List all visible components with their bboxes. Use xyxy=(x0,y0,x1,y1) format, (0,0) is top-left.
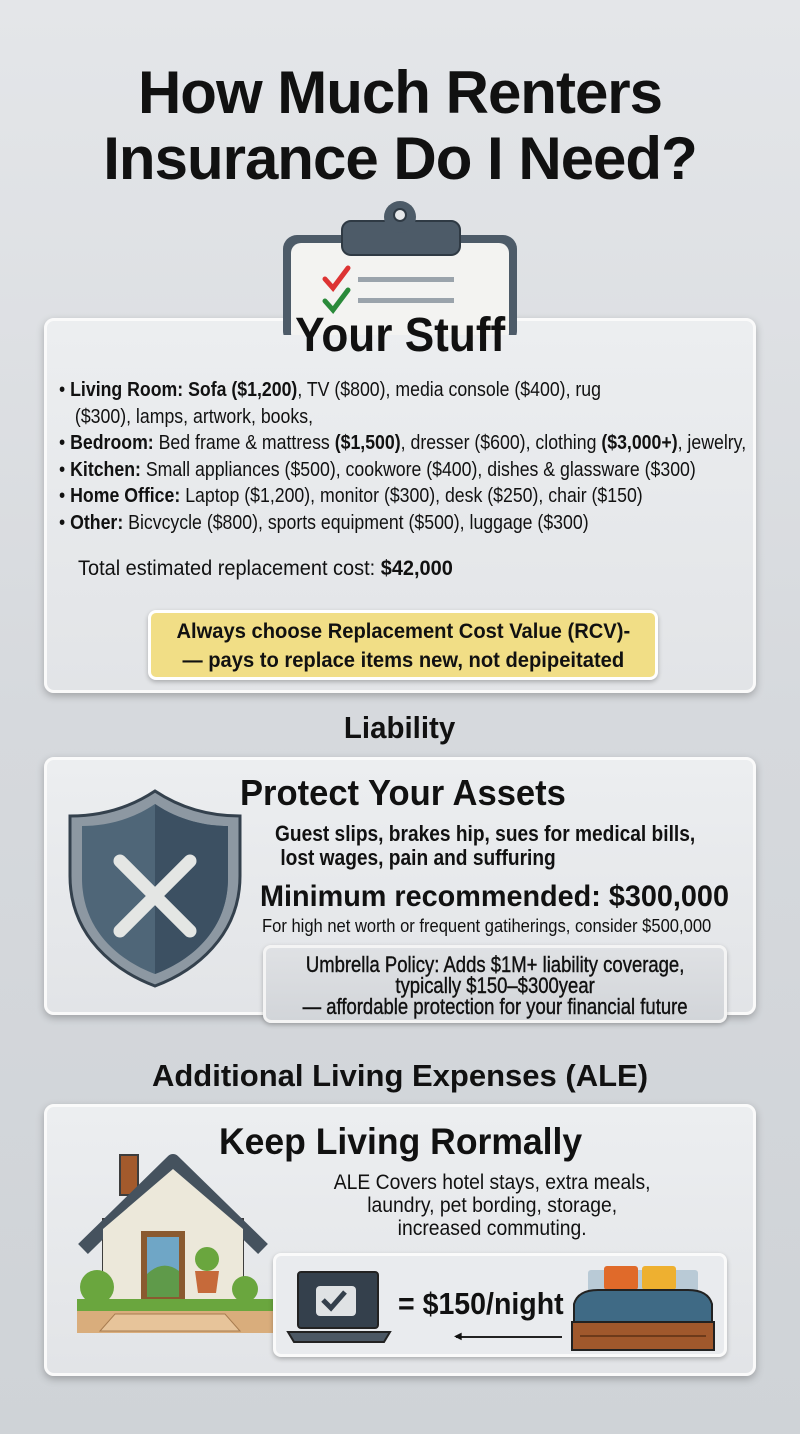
heading: keep living: Keep Living Rormally xyxy=(219,1121,582,1162)
heading: protect your assets: Protect Your Assets xyxy=(240,772,566,813)
text: ALE covers: increased commuting. xyxy=(397,1217,587,1240)
text: $150/night: = $150/night xyxy=(398,1286,564,1321)
title: How Much Renters xyxy=(138,59,662,126)
text: high net worth: For high net worth or frequent gatiherings, consider $500,000 xyxy=(262,916,711,936)
text: ALE covers xyxy=(334,1171,650,1240)
list of items xyxy=(59,379,746,534)
heading: your stuff: Your Stuff xyxy=(295,309,505,362)
icon: clipboard xyxy=(283,201,517,335)
list of items: • Kitchen: Small appliances ($500), cookwore ($400), dishes & glassware ($300) xyxy=(59,458,696,480)
panel: your stuff xyxy=(44,318,756,693)
arrow xyxy=(456,1336,562,1338)
text: ALE covers: laundry, pet bording, storage, xyxy=(367,1194,617,1217)
callout: RCV xyxy=(148,610,658,680)
callout: umbrella policy: typically $150–$300year xyxy=(395,973,595,998)
callout: umbrella policy: Umbrella Policy: Adds $1M+ liability coverage, xyxy=(306,952,684,977)
heading: liability: Liability xyxy=(344,710,456,745)
list of items: • Bedroom: Bed frame & mattress ($1,500), dresser ($600), clothing ($3,000+), jewelry, xyxy=(59,432,746,454)
list of items: • Living Room: Sofa ($1,200), TV ($800), media console ($400), rug xyxy=(59,379,601,401)
panel: ALE xyxy=(44,1104,756,1376)
text: scenario: Guest slips, brakes hip, sues for medical bills, xyxy=(275,821,695,846)
total cost: Total estimated replacement cost: $42,000 xyxy=(78,557,453,580)
heading: ALE: Additional Living Expenses (ALE) xyxy=(152,1058,648,1093)
callout: RCV: Always choose Replacement Cost Value (RCV)- xyxy=(176,620,630,643)
callout: RCV: — pays to replace items new, not depipeitated xyxy=(182,649,624,672)
icon: bed xyxy=(571,1266,715,1351)
list of items: ($300), lamps, artwork, books, xyxy=(75,406,313,428)
text: scenario xyxy=(275,821,695,870)
icon: house xyxy=(77,1154,273,1333)
title xyxy=(103,59,697,192)
icon: shield xyxy=(68,789,242,988)
list of items: • Home Office: Laptop ($1,200), monitor ($300), desk ($250), chair ($150) xyxy=(59,485,643,507)
panel: liability xyxy=(44,757,756,1015)
text: ALE covers: ALE Covers hotel stays, extra meals, xyxy=(334,1171,650,1194)
title: Insurance Do I Need? xyxy=(103,125,697,192)
text: minimum recommended: Minimum recommended: $300,000 xyxy=(260,880,729,913)
text: scenario: lost wages, pain and suffuring xyxy=(280,845,556,870)
callout: umbrella policy xyxy=(263,945,727,1023)
arrow: ◀ xyxy=(454,1331,462,1342)
callout: umbrella policy: — affordable protection for your financial future xyxy=(303,994,688,1019)
list of items: • Other: Bicvcycle ($800), sports equipment ($500), luggage ($300) xyxy=(59,512,589,534)
callout: cost per night xyxy=(273,1253,727,1357)
icon: laptop xyxy=(286,1271,392,1343)
